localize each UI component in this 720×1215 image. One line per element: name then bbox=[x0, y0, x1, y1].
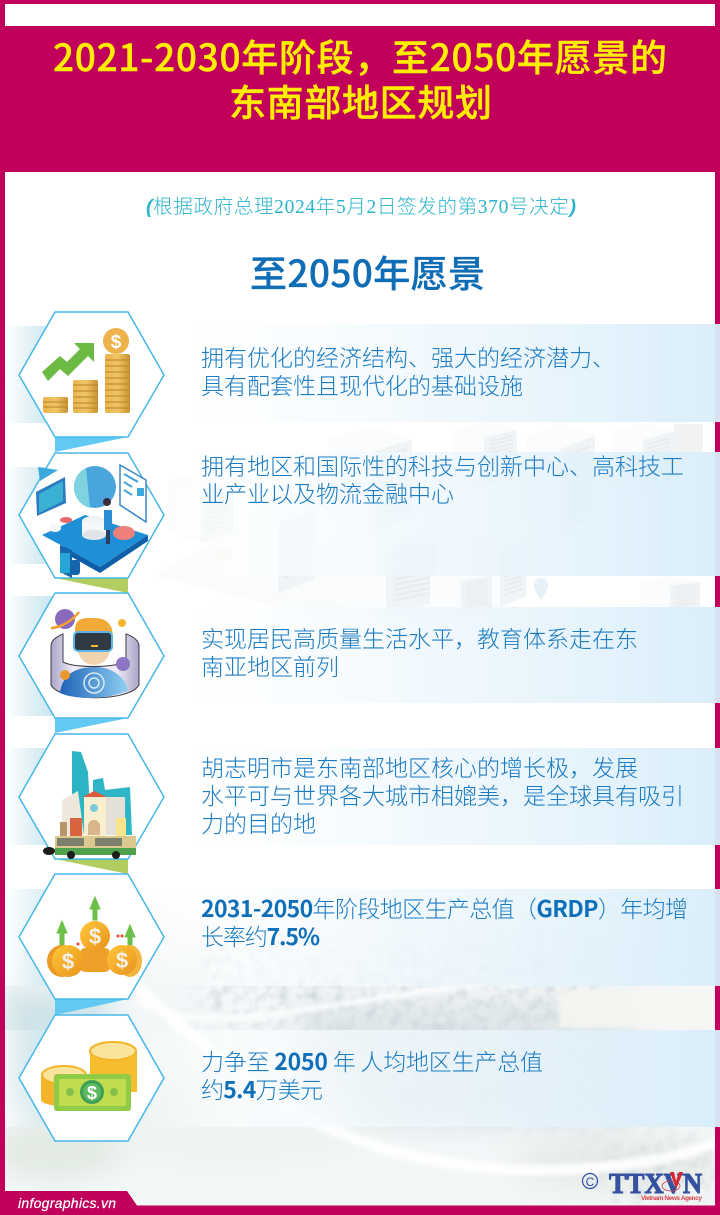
icon: technology workspace bbox=[36, 465, 148, 578]
icon: VR headset in glass screen bbox=[51, 609, 139, 698]
text: item 2: 拥有地区和国际性的科技与创新中心、高科技工 bbox=[201, 448, 684, 482]
item 4: Ho Chi Minh City bbox=[19, 734, 684, 859]
hexagon 2 bbox=[19, 453, 164, 578]
icon: coins with green arrows: $ bbox=[62, 949, 74, 974]
item 3: quality of life and education bbox=[19, 593, 638, 718]
icon: rising coin stacks and arrow: $ bbox=[111, 332, 122, 353]
text: item 4: 水平可与世界各大城市相媲美，是全球具有吸引 bbox=[201, 777, 684, 811]
text: item 3: 南亚地区前列 bbox=[201, 648, 339, 682]
title bbox=[53, 28, 667, 127]
footer label: infographics.vn: infographics.vn bbox=[18, 1195, 116, 1211]
connector: green bbox=[55, 859, 128, 874]
icon: coins with green arrows bbox=[47, 897, 142, 977]
connector: blue bbox=[55, 999, 128, 1015]
text: item 3: 实现居民高质量生活水平，教育体系走在东 bbox=[201, 620, 638, 654]
text: item 1 bbox=[201, 339, 615, 401]
icon: city skyline and bus bbox=[43, 751, 136, 859]
text: item 5: 长率约7.5% bbox=[201, 918, 320, 952]
item 5: GRDP growth bbox=[19, 874, 688, 999]
icon: banknote and coin stacks: $ bbox=[87, 1083, 97, 1103]
text: item 2: 业产业以及物流金融中心 bbox=[201, 475, 454, 509]
text: item 1: 具有配套性且现代化的基础设施 bbox=[201, 367, 523, 401]
hexagon 3 bbox=[19, 593, 164, 718]
text: item 4: 力的目的地 bbox=[201, 805, 316, 839]
background photo: aerial view of the city and river bbox=[0, 885, 720, 1206]
text: item 4 bbox=[201, 749, 684, 839]
subtitle: decision reference: (根据政府总理2024年5月2日签发的第370号决定) bbox=[146, 190, 576, 219]
text: item 2 bbox=[201, 448, 684, 509]
title: 东南部地区规划 bbox=[229, 73, 492, 127]
icon: coins with green arrows: $ bbox=[116, 948, 128, 973]
icon: rising coin stacks and arrow bbox=[42, 328, 130, 413]
hexagon 4 bbox=[19, 734, 164, 859]
title: 2021-2030年阶段，至2050年愿景的 bbox=[53, 28, 667, 82]
hexagon 6 bbox=[19, 1015, 164, 1141]
icon: banknote and coin stacks bbox=[41, 1042, 137, 1111]
text: item 6 bbox=[201, 1043, 543, 1105]
photo texture: city blocks bbox=[200, 930, 715, 1200]
text: item 5 bbox=[201, 890, 688, 952]
text: item 1: 拥有优化的经济结构、强大的经济潜力、 bbox=[201, 339, 615, 373]
hexagon 1 bbox=[19, 312, 164, 437]
connector: blue bbox=[55, 437, 128, 452]
text: item 6: 约5.4万美元 bbox=[201, 1071, 323, 1105]
item 2: science and technology bbox=[19, 448, 684, 578]
connector: green bbox=[55, 578, 128, 593]
heading: vision to 2050: 至2050年愿景 bbox=[250, 244, 485, 298]
connector: blue bbox=[55, 718, 128, 733]
logo: TTXVN Vietnam News Agency bbox=[582, 1168, 702, 1202]
hexagon 5 bbox=[19, 874, 164, 999]
logo: TTXVN Vietnam News Agency: TTXVN bbox=[609, 1168, 702, 1200]
background illustration: faint isometric city bbox=[155, 422, 703, 625]
icon: coins with green arrows: $ bbox=[89, 924, 101, 949]
text: item 5: 2031-2050年阶段地区生产总值（GRDP）年均增 bbox=[201, 890, 688, 924]
text: item 3 bbox=[201, 620, 638, 682]
bands behind the six vision items bbox=[5, 324, 720, 1127]
logo: TTXVN Vietnam News Agency: Vietnam News Agency bbox=[641, 1195, 702, 1202]
text: item 4: 胡志明市是东南部地区核心的增长极，发展 bbox=[201, 749, 638, 783]
text: item 6: 力争至 2050 年 人均地区生产总值 bbox=[201, 1043, 543, 1077]
logo: TTXVN Vietnam News Agency: C bbox=[586, 1175, 595, 1189]
item 1: economy bbox=[19, 312, 615, 437]
item 6: GRDP per capita bbox=[19, 1015, 543, 1141]
